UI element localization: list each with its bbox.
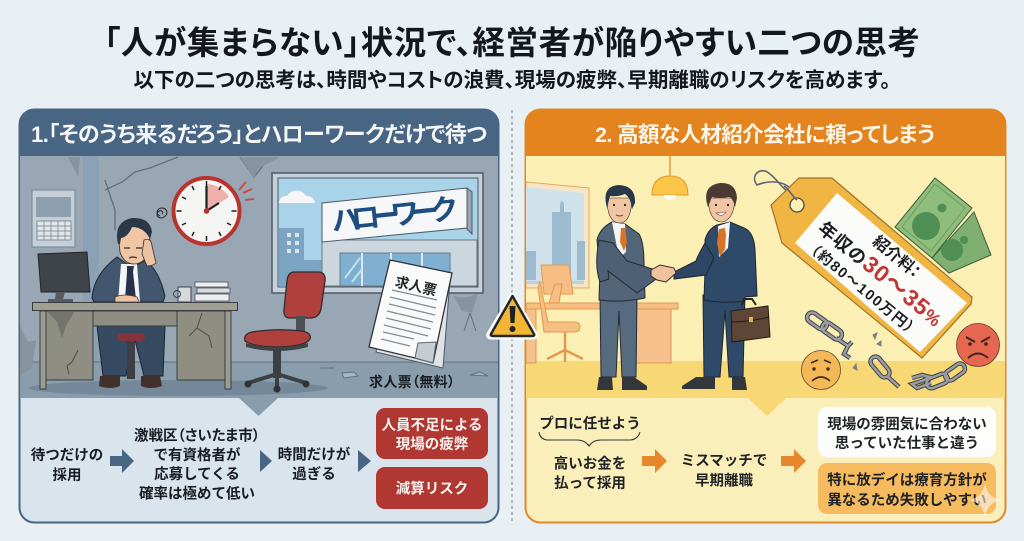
icon: coffee mug and files bbox=[174, 282, 230, 302]
price tag text: 年収の30～35% bbox=[814, 214, 948, 331]
icon: desk chair bbox=[244, 272, 325, 392]
handshake bbox=[651, 265, 676, 282]
speech brace: leave it to pros: プロに任せよう bbox=[539, 416, 641, 432]
red result: burnout bbox=[376, 408, 488, 459]
worried man at desk bbox=[92, 208, 167, 388]
speech brace: leave it to pros bbox=[539, 416, 641, 446]
pay high fee text bbox=[554, 454, 626, 492]
white result box: 思っていた仕事と違う bbox=[835, 434, 979, 452]
panel: left, Hello Work waiting bbox=[19, 109, 499, 522]
arrow bbox=[110, 449, 134, 473]
pendant lamp bbox=[652, 156, 688, 200]
right flow: pay and mismatch bbox=[539, 416, 806, 492]
icon: sad face bbox=[802, 350, 840, 390]
left flow: waiting only: 待つだけの bbox=[31, 447, 103, 464]
icon: angry face bbox=[956, 324, 1000, 366]
monitor bbox=[38, 252, 90, 302]
icon: wall calendar bbox=[32, 190, 75, 247]
mismatch text: 早期離職 bbox=[695, 472, 753, 490]
time passes text bbox=[278, 446, 351, 483]
left panel heading: 1.「そのうち来るだろう」とハローワークだけで待つ bbox=[31, 122, 487, 147]
white result box: 現場の雰囲気に合わない bbox=[827, 415, 987, 433]
arrow bbox=[781, 449, 806, 473]
right office scene bbox=[526, 156, 1005, 398]
time passes text: 時間だけが bbox=[278, 446, 351, 464]
price tag text: 紹介料： bbox=[869, 232, 924, 282]
competitive area text: 激戦区（さいたま市） bbox=[134, 426, 260, 444]
connector notch bbox=[748, 398, 786, 416]
connector notch bbox=[239, 398, 278, 416]
red result: penalty risk bbox=[376, 467, 488, 509]
pay high fee text: 高いお金を bbox=[554, 454, 626, 472]
subtitle: 以下の二つの思考は、時間やコストの浪費、現場の疲弊、早期離職のリスクを高めます。 bbox=[134, 69, 890, 92]
red result: penalty risk: 減算リスク bbox=[396, 480, 468, 498]
left flow: waiting only bbox=[31, 426, 371, 502]
arrow bbox=[642, 449, 667, 473]
orange result box: 特に放デイは療育方針が bbox=[827, 471, 987, 489]
arrow bbox=[358, 450, 371, 472]
right panel heading bbox=[525, 109, 1006, 156]
man in navy suit with briefcase bbox=[674, 183, 770, 390]
title: 「人が集まらない」状況で、経営者が陥りやすい二つの思考 bbox=[104, 24, 920, 61]
competitive area text: 応募してくる bbox=[154, 466, 240, 483]
red result: burnout: 人員不足による bbox=[381, 417, 483, 434]
man in grey suit bbox=[597, 185, 659, 390]
pay high fee text: 払って採用 bbox=[554, 474, 626, 492]
mismatch text bbox=[681, 452, 767, 490]
panel: right, expensive recruiters bbox=[525, 109, 1006, 522]
icon: clock bbox=[174, 178, 254, 244]
job posting paper: 求人票 bbox=[394, 273, 438, 299]
red result: burnout: 現場の疲弊 bbox=[396, 436, 469, 453]
orange result box: 異なるため失敗しやすい bbox=[827, 491, 987, 509]
job posting paper bbox=[369, 260, 452, 368]
mismatch text: ミスマッチで bbox=[681, 452, 767, 470]
sparkle mark bbox=[968, 483, 1002, 518]
white result box bbox=[818, 407, 996, 457]
left office scene bbox=[20, 156, 498, 398]
icon: warning triangle bbox=[489, 295, 535, 337]
job posting caption: 求人票（無料） bbox=[369, 374, 455, 390]
competitive area text: で有資格者が bbox=[154, 446, 241, 464]
price tag text: （約80～100万円） bbox=[807, 242, 917, 336]
competitive area text bbox=[134, 426, 260, 502]
competitive area text: 確率は極めて低い bbox=[139, 484, 255, 502]
broken chains bbox=[805, 311, 967, 390]
Hello Work sign: ハローワーク bbox=[330, 193, 460, 239]
briefcase bbox=[731, 299, 770, 342]
money notes bbox=[895, 178, 991, 273]
arrow bbox=[260, 450, 272, 472]
office window and desk bbox=[526, 182, 678, 363]
left panel heading bbox=[19, 109, 499, 156]
window with Hello Work building bbox=[272, 173, 483, 293]
price tag bbox=[755, 171, 972, 358]
left flow: waiting only: 採用 bbox=[52, 467, 82, 484]
desk bbox=[32, 302, 238, 389]
right panel heading: 2. 高額な人材紹介会社に頼ってしまう bbox=[595, 123, 935, 147]
orange result box bbox=[818, 463, 996, 514]
time passes text: 過ぎる bbox=[292, 465, 336, 483]
